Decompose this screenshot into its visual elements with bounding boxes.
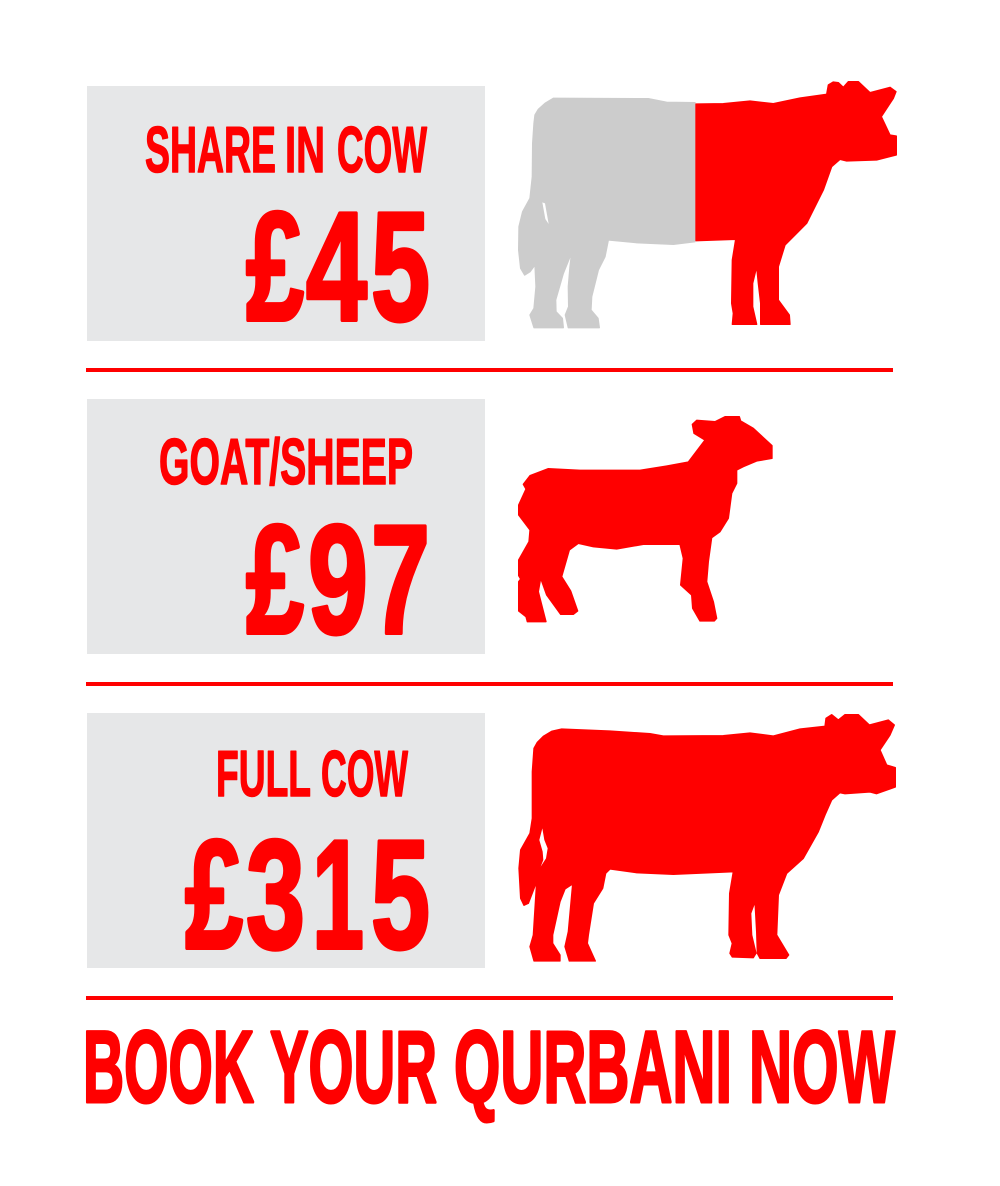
price: 45 pounds: £ [246,180,304,353]
price: 97 pounds [246,493,430,666]
price: 315 pounds: £ [185,808,243,981]
icon: full cow [519,715,895,961]
price: 315 pounds [185,808,430,981]
divider [86,996,893,1000]
heading: share in cow: COW [337,113,427,186]
call to action: QURBANI [454,1010,732,1124]
heading: share in cow: IN [285,113,325,186]
call to action: NOW [749,1010,895,1124]
call to action: BOOK [83,1010,254,1124]
price: 97 pounds: 9 [308,493,368,666]
icon: sheep [519,417,772,622]
price: 45 pounds [246,180,430,353]
heading: full cow: FULL [216,737,311,810]
price: 315 pounds: 3 [246,808,305,981]
panel: full cow [87,713,485,968]
divider [86,368,893,372]
panel: goat or sheep [87,399,485,654]
price: 97 pounds: £ [246,493,304,666]
price: 45 pounds: 5 [371,180,430,353]
price: 315 pounds: 1 [312,808,364,981]
heading: goat or sheep: GOAT/SHEEP [159,425,413,498]
price: 97 pounds: 7 [371,493,430,666]
icon: cow with rear half grey and front half red [519,82,896,328]
heading: share in cow: SHARE [145,113,276,186]
heading: full cow: COW [321,737,408,810]
panel: share in cow [87,86,485,341]
call to action: YOUR [270,1010,437,1124]
call to action [83,1010,895,1124]
price: 315 pounds: 5 [371,808,430,981]
price: 45 pounds: 4 [306,180,367,353]
divider [86,682,893,686]
